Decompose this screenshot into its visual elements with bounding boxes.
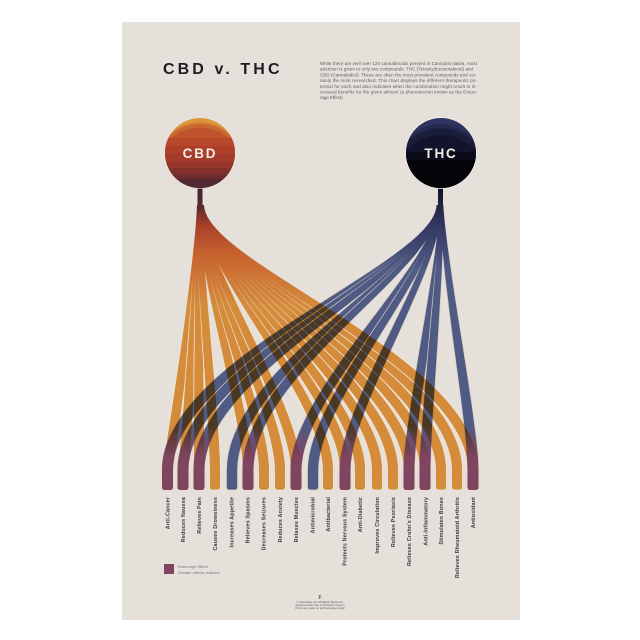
intro text block: rage Effect)	[320, 95, 343, 100]
title: CBD v. THC	[163, 61, 283, 78]
footer credits: © Scientifica Ltd. All Rights Reserved.	[296, 600, 344, 604]
effect labels: Antimicrobial	[310, 497, 316, 533]
effect labels: Anti-Diabetic	[358, 497, 364, 532]
effect labels: Reduces Nausea	[181, 496, 187, 542]
intro text block: CBD (Cannabidiol). These are often the most prevalent compounds and cer-	[320, 72, 478, 77]
effect labels: Stimulates Bones	[439, 497, 445, 545]
effect labels: Causes Drowsiness	[213, 497, 219, 550]
CBD label: CBD	[183, 146, 217, 161]
legend: Entourage Effect	[178, 564, 209, 569]
strands: CBD to effects	[162, 186, 478, 490]
intro text block: While there are well over 120 cannabinoids present in Cannabis sativa, most	[320, 61, 478, 66]
CBD circle	[164, 118, 236, 189]
effect labels	[166, 496, 477, 578]
effect labels: Antibacterial	[326, 497, 332, 532]
THC circle	[405, 118, 477, 189]
effect labels: Anti-Cancer	[166, 496, 172, 529]
effect labels: Relieves Pain	[197, 497, 203, 534]
effect labels: Relieves Psoriasis	[391, 497, 397, 547]
legend	[164, 564, 220, 575]
intro text block: tential for each and also indicates when the combination might result in in-	[320, 84, 478, 89]
intro text block: tainly the most researched. This chart displays the different therapeutic po-	[320, 78, 478, 83]
THC label: THC	[424, 146, 458, 161]
entourage effect strand ends (purple)	[162, 205, 478, 490]
footer credits: Prints are made on archival paper stock	[295, 606, 345, 610]
effect labels: Improves Circulation	[375, 497, 381, 554]
intro text block	[320, 61, 478, 100]
footer credits: F	[318, 595, 322, 601]
legend: Greater effects realized	[178, 570, 220, 575]
effect labels: Increases Appetite	[230, 497, 236, 547]
footer credits	[295, 595, 345, 610]
intro text block: creased benefits for the given ailment (a phenomenon known as the Entou-	[320, 90, 478, 94]
footer credits: Designed with care in Portland, Oregon	[296, 603, 345, 607]
effect labels: Relaxes Muscles	[294, 497, 300, 542]
effect labels: Decreases Seizures	[262, 497, 268, 550]
effect labels: Reduces Anxiety	[278, 497, 284, 542]
intro text block: attention is given to only two compounds: THC (Tetrahydrocannabinol) and	[320, 67, 474, 72]
effect labels: Anti-Inflammatory	[424, 497, 430, 546]
effect labels: Protects Nervous System	[342, 497, 348, 566]
poster background	[122, 22, 520, 620]
strands: THC to effects	[162, 186, 478, 490]
effect labels: Relieves Rheumatoid Arthritis	[455, 497, 461, 578]
effect labels: Antioxidant	[471, 497, 477, 528]
effect labels: Relieves Crohn's Disease	[407, 497, 413, 566]
effect labels: Relieves Spasms	[246, 497, 252, 543]
